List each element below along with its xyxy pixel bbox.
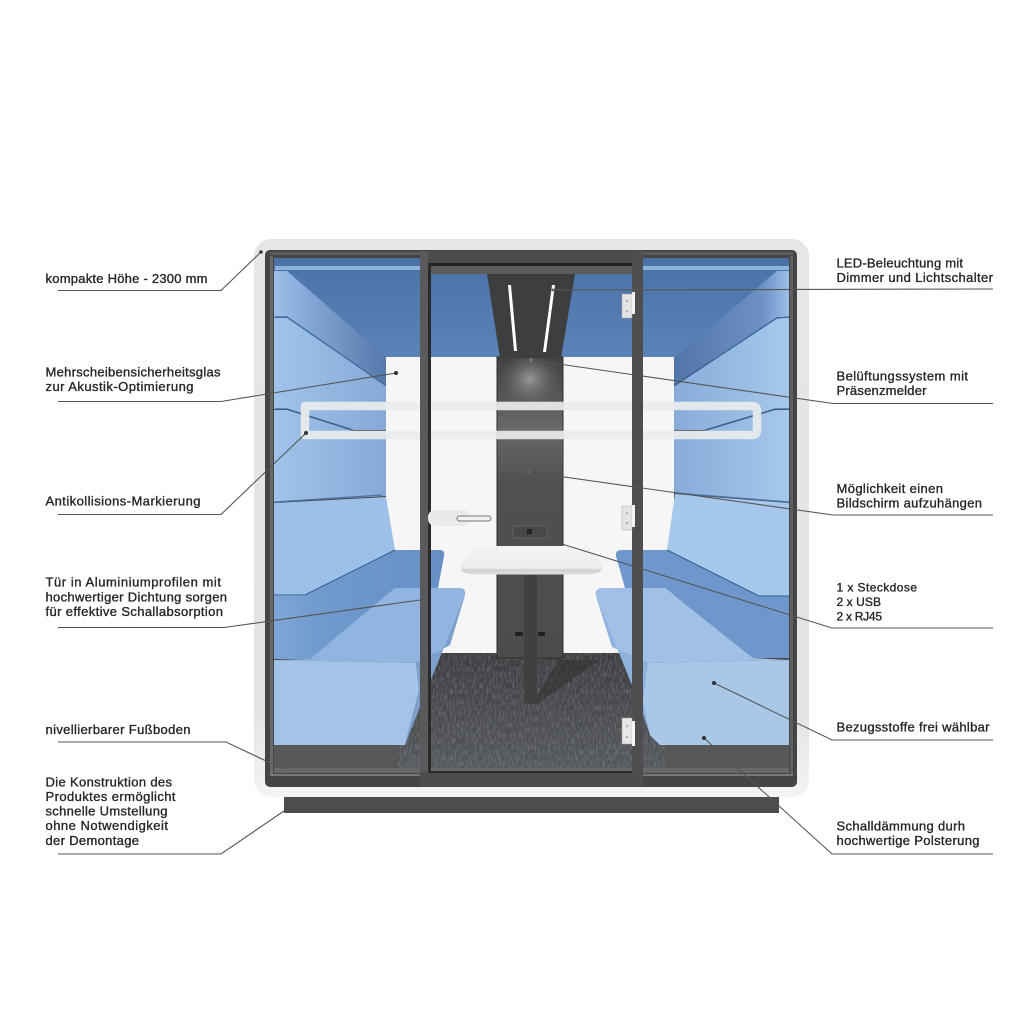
label: Antikollisions-Markierung: Antikollisions-Markierung xyxy=(46,494,200,508)
door frame xyxy=(420,251,643,787)
label: Die Konstruktion: schnelle Umstellung xyxy=(46,804,168,818)
label: Schalldämmung: hochwertige Polsterung xyxy=(836,833,980,848)
label: LED-Beleuchtung: LED-Beleuchtung mit xyxy=(836,256,963,270)
left sofa xyxy=(274,550,465,768)
label: Tür in Aluminiumprofilen: hochwertiger Dichtung sorgen xyxy=(46,590,227,604)
leader lines left xyxy=(58,252,420,854)
ceiling light strips xyxy=(275,266,789,270)
window bottom sill xyxy=(272,768,790,773)
label: Schalldämmung: Schalldämmung durh xyxy=(836,818,965,834)
door hinges xyxy=(622,292,635,746)
right sofa xyxy=(596,550,789,768)
label: Die Konstruktion: Produktes ermöglicht xyxy=(46,789,176,804)
table leg xyxy=(515,575,545,704)
right wall panels xyxy=(667,271,789,596)
label: Tür in Aluminiumprofilen: Tür in Aluminiumprofilen mit xyxy=(46,574,221,590)
screen socket panel xyxy=(513,526,547,538)
label: nivellierbarer Fußboden: nivellierbarer Fußboden xyxy=(46,722,190,737)
central column xyxy=(497,349,563,658)
label: Möglichkeit Bildschirm: Möglichkeit einen xyxy=(836,481,943,496)
label: Anschlüsse: 2 x USB xyxy=(836,595,881,609)
left wall panels xyxy=(274,271,395,596)
label: Schalldämmung xyxy=(836,818,980,848)
door handle xyxy=(428,510,491,526)
label: Mehrscheibensicherheitsglas: Mehrscheibensicherheitsglas xyxy=(46,364,221,380)
label: Mehrscheibensicherheitsglas: zur Akustik-Optimierung xyxy=(46,379,194,394)
label: Belüftungssystem: Präsenzmelder xyxy=(836,383,927,398)
label: Anschlüsse xyxy=(836,580,917,624)
label: Die Konstruktion: ohne Notwendigkeit xyxy=(46,818,168,833)
leader dots xyxy=(259,250,716,740)
ceiling xyxy=(272,258,790,359)
label: Bezugsstoffe: Bezugsstoffe frei wählbar xyxy=(836,720,990,734)
leader lines right xyxy=(529,289,993,854)
label: Die Konstruktion: Die Konstruktion des xyxy=(46,774,172,790)
label: Möglichkeit Bildschirm: Bildschirm aufzuhängen xyxy=(836,496,982,510)
carpet floor xyxy=(272,653,790,778)
label: Belüftungssystem: Belüftungssystem mit xyxy=(836,368,968,384)
label: Tür in Aluminiumprofilen xyxy=(46,574,227,619)
label: LED-Beleuchtung xyxy=(836,256,994,285)
label: Anschlüsse: 1 x Steckdose xyxy=(836,580,917,594)
label: Tür in Aluminiumprofilen: für effektive Schallabsorption xyxy=(46,604,223,619)
ceiling light trough xyxy=(487,274,575,358)
pod base plinth xyxy=(284,797,779,813)
back wall xyxy=(386,357,674,657)
pod outer shell xyxy=(254,239,809,797)
label: Mehrscheibensicherheitsglas xyxy=(46,364,221,394)
pod window frame xyxy=(265,250,797,787)
pod interior xyxy=(272,258,790,778)
label: Die Konstruktion xyxy=(46,774,176,848)
label: Die Konstruktion: der Demontage xyxy=(46,833,139,848)
table top xyxy=(460,546,602,574)
anti-collision marking xyxy=(305,406,757,435)
illustration: meeting pod xyxy=(254,239,809,813)
label: kompakte Höhe: kompakte Höhe - 2300 mm xyxy=(46,271,208,286)
label: Belüftungssystem xyxy=(836,368,968,398)
label: Anschlüsse: 2 x RJ45 xyxy=(836,610,882,624)
label: LED-Beleuchtung: Dimmer und Lichtschalter xyxy=(836,270,994,285)
label: Möglichkeit Bildschirm xyxy=(836,481,982,510)
